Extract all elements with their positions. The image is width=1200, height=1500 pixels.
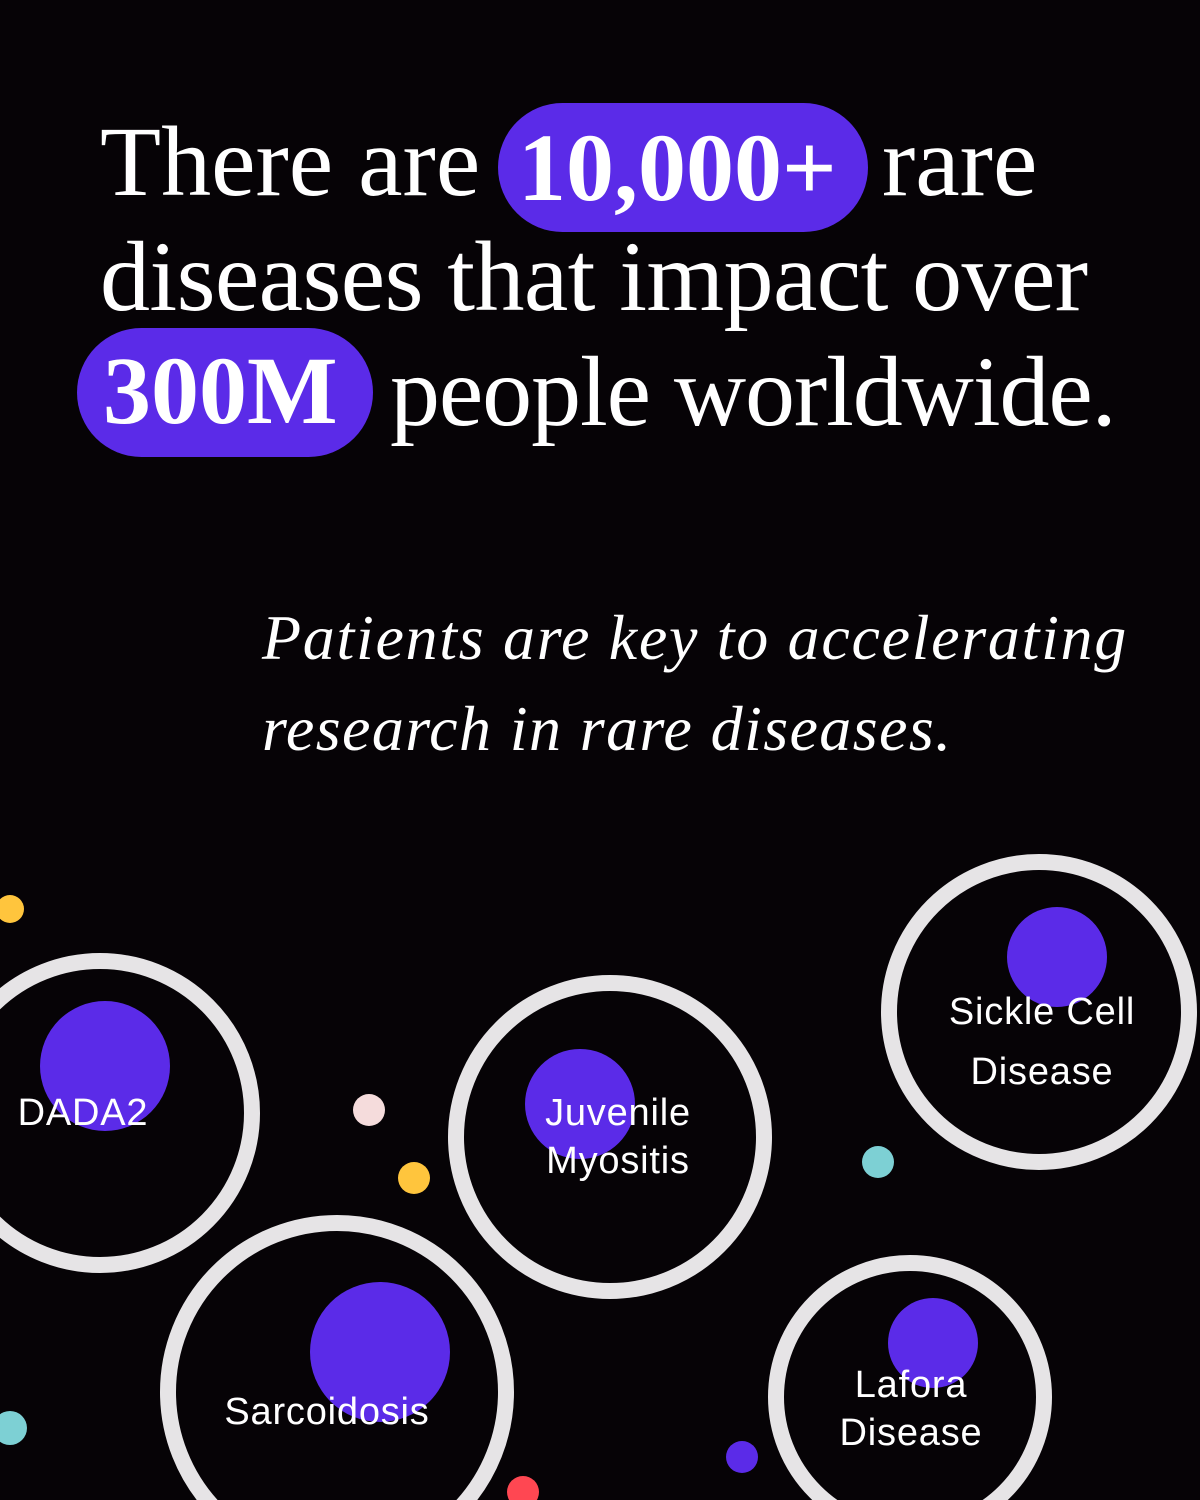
- bubble: Sarcoidosis: Sarcoidosis: [224, 1391, 430, 1433]
- headline line 1 end: rare: [882, 106, 1037, 217]
- bubble: Lafora Disease: [776, 1263, 1044, 1500]
- highlight number 300M: 300M: [103, 337, 338, 444]
- pill: 10,000+: [498, 103, 868, 232]
- bubble: Juvenile Myositis: Juvenile: [545, 1092, 691, 1134]
- bubble: Sickle Cell Disease: Sickle Cell: [949, 991, 1135, 1033]
- subtitle line 2: research in rare diseases.: [262, 693, 953, 764]
- bubble: Lafora Disease: Disease: [840, 1412, 982, 1454]
- subtitle line 1: Patients are key to accelerating: [262, 602, 1128, 673]
- pill: 300M: [77, 328, 373, 457]
- bubble: Sarcoidosis: [168, 1223, 506, 1500]
- bubble: DADA2: DADA2: [18, 1092, 148, 1134]
- headline line 2: diseases that impact over: [100, 221, 1087, 332]
- bubble: DADA2: [0, 961, 252, 1265]
- highlight number 10,000+: 10,000+: [518, 114, 837, 221]
- headline: [77, 103, 1116, 457]
- bubble: Sickle Cell Disease: Disease: [971, 1051, 1113, 1093]
- bubble: Juvenile Myositis: Myositis: [546, 1140, 690, 1182]
- bubble: Lafora Disease: Lafora: [855, 1364, 967, 1406]
- bubble: Sickle Cell Disease: [889, 862, 1189, 1162]
- headline line 1: There are: [100, 106, 480, 217]
- decorative dots: [0, 895, 894, 1500]
- subtitle: [262, 602, 1128, 764]
- bubble: Juvenile Myositis: [456, 983, 764, 1291]
- headline line 3: people worldwide.: [390, 336, 1116, 447]
